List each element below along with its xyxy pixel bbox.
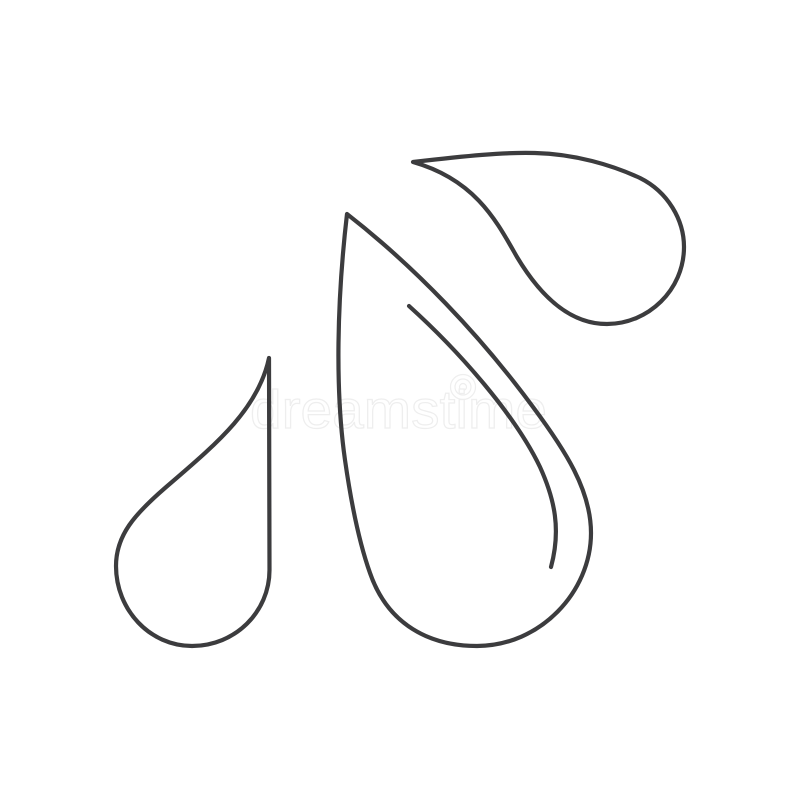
icon: large drop highlight bbox=[409, 306, 556, 567]
icon: lower left drop bbox=[116, 358, 270, 646]
icon: large center drop bbox=[338, 214, 591, 646]
icon: upper right drop bbox=[413, 153, 684, 324]
watermark: dreamstime bbox=[250, 380, 547, 440]
